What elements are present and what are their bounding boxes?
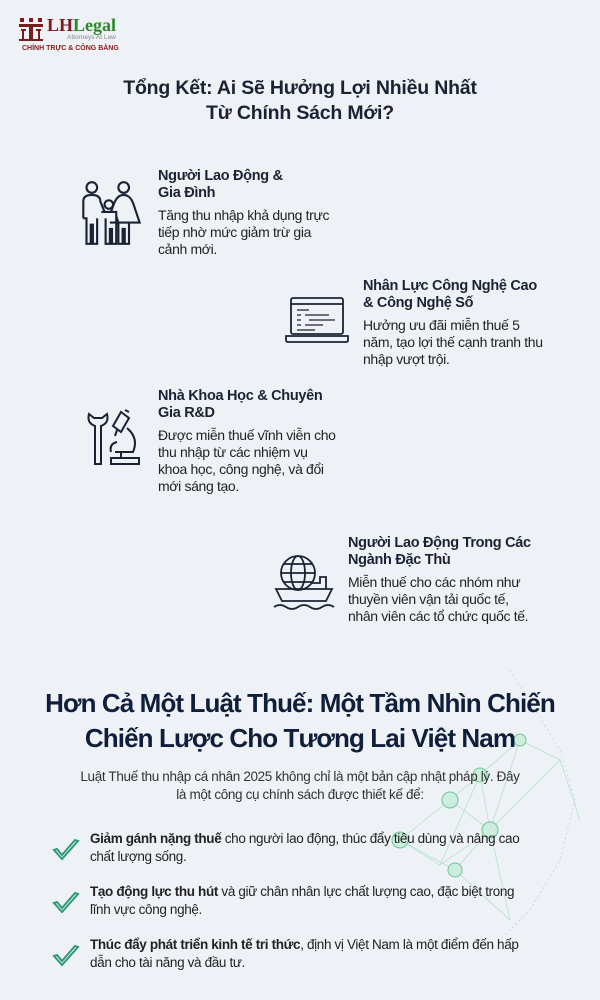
section 2 title: Chiến Lược Cho Tương Lai Việt Nam (85, 723, 515, 753)
body text: thuyền viên vận tải quốc tế, (348, 591, 509, 607)
icon: laptop (285, 297, 349, 343)
body text: Tăng thu nhập khả dụng trực (158, 207, 329, 223)
benefit list (52, 831, 520, 970)
body text: nhân viên các tổ chức quốc tế. (348, 608, 528, 624)
icon: check (52, 892, 80, 914)
body text: tiếp nhờ mức giảm trừ gia (158, 224, 311, 240)
bullet 1 (52, 831, 520, 864)
body text: nhập vượt trội. (363, 351, 449, 367)
icon: globe & ship (274, 555, 334, 610)
heading (348, 535, 531, 624)
body text (158, 207, 330, 257)
bullet 1: chất lượng sống. (90, 849, 186, 864)
bullet 3: dẫn cho tài năng và đầu tư. (90, 955, 245, 970)
bullet 1: Giảm gánh nặng thuế cho người lao động, thúc đẩy tiêu dùng và nâng cao (90, 831, 519, 846)
icon: family (82, 181, 141, 245)
item: special sectors (274, 535, 531, 624)
bullet 2 (52, 884, 514, 917)
body text: Hưởng ưu đãi miễn thuế 5 (363, 317, 520, 333)
brand name: LHLegal (47, 15, 116, 35)
bullet 2: Tạo động lực thu hút và giữ chân nhân lực chất lượng cao, đặc biệt trong (90, 884, 514, 899)
heading: Nhà Khoa Học & Chuyên (158, 388, 322, 404)
icon: logo mark (19, 18, 43, 41)
body text (158, 427, 336, 494)
heading (158, 388, 336, 494)
heading: Ngành Đặc Thù (348, 552, 450, 568)
bullet 3: Thúc đẩy phát triển kinh tế tri thức, định vị Việt Nam là một điểm đến hấp (90, 937, 519, 952)
body text: Được miễn thuế vĩnh viễn cho (158, 427, 336, 443)
item: scientists R&D (88, 388, 336, 494)
logo (19, 15, 119, 52)
icon: check (52, 944, 80, 966)
heading: Người Lao Động & (158, 168, 283, 184)
intro text: Luật Thuế thu nhập cá nhân 2025 không chỉ là một bản cập nhật pháp lý. Đây (80, 769, 520, 784)
body text (363, 317, 543, 367)
body text: Miễn thuế cho các nhóm như (348, 574, 520, 590)
body text: khoa học, công nghệ, và đổi (158, 461, 324, 477)
heading (363, 278, 543, 367)
bullet 3 (52, 937, 519, 970)
heading: Nhân Lực Công Nghệ Cao (363, 278, 537, 294)
item: workers & family (82, 168, 330, 257)
section 2 title (45, 688, 555, 753)
heading (158, 168, 330, 257)
heading: Gia R&D (158, 405, 215, 421)
heading: Gia Đình (158, 185, 215, 201)
heading: Người Lao Động Trong Các (348, 535, 531, 551)
logo: Attorneys At Law (67, 34, 116, 41)
tagline: CHÍNH TRỰC & CÔNG BẰNG (22, 45, 119, 52)
body text: cảnh mới. (158, 241, 217, 257)
body text: mới sáng tạo. (158, 478, 239, 494)
bullet 2: lĩnh vực công nghệ. (90, 902, 202, 917)
body text (348, 574, 528, 624)
icon: check (52, 838, 80, 860)
body text: năm, tạo lợi thế cạnh tranh thu (363, 334, 543, 350)
icon: wrench & microscope (88, 409, 140, 465)
heading: & Công Nghệ Số (363, 295, 473, 311)
title (123, 77, 477, 124)
intro text (80, 769, 520, 802)
body text: thu nhập từ các nhiệm vụ (158, 444, 308, 460)
background network map (392, 670, 580, 939)
intro text: là một công cụ chính sách được thiết kế để: (176, 787, 424, 802)
title: Tổng Kết: Ai Sẽ Hưởng Lợi Nhiều Nhất (123, 77, 477, 99)
title: Từ Chính Sách Mới? (206, 102, 394, 124)
section 2 title: Hơn Cả Một Luật Thuế: Một Tầm Nhìn Chiến (45, 688, 555, 718)
item: tech workforce (285, 278, 543, 367)
